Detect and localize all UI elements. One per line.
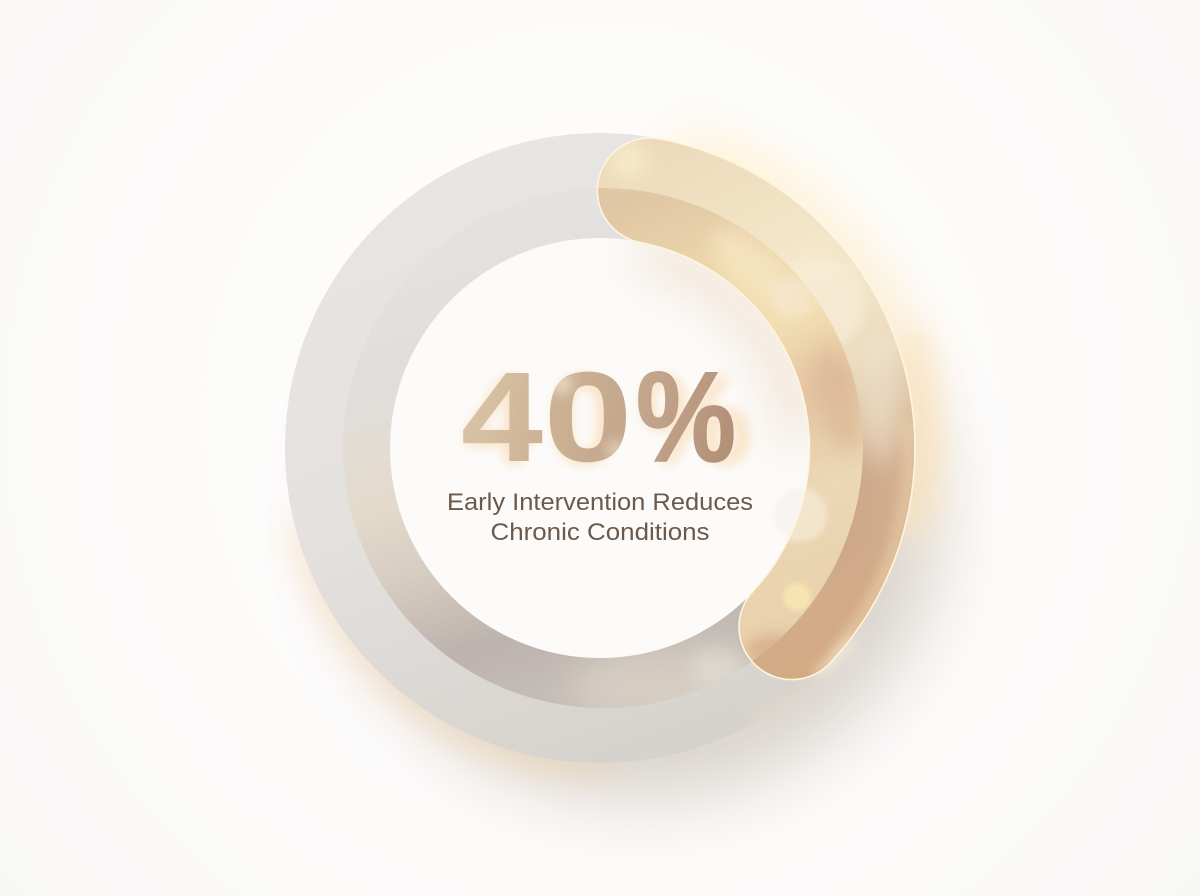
big number 40%: %: [636, 346, 736, 489]
big number 40%: 4: [461, 346, 543, 489]
centre disc: [390, 238, 810, 658]
caption: [447, 489, 753, 546]
grey track ring: [285, 133, 915, 763]
gold progress arc: [590, 130, 925, 690]
infographic: 40% radial progress ring: [281, 120, 971, 828]
darker inner band of track: [343, 400, 751, 708]
bokeh lights: [772, 276, 814, 318]
big number 40%: 40%: [463, 349, 752, 492]
ring shadow and warm glow: [300, 150, 940, 800]
caption: Chronic Conditions: [490, 519, 710, 546]
big number 40%: 0: [544, 346, 632, 489]
pale gold streak below arc end: [755, 672, 835, 722]
caption: Early Intervention Reduces: [447, 489, 753, 516]
